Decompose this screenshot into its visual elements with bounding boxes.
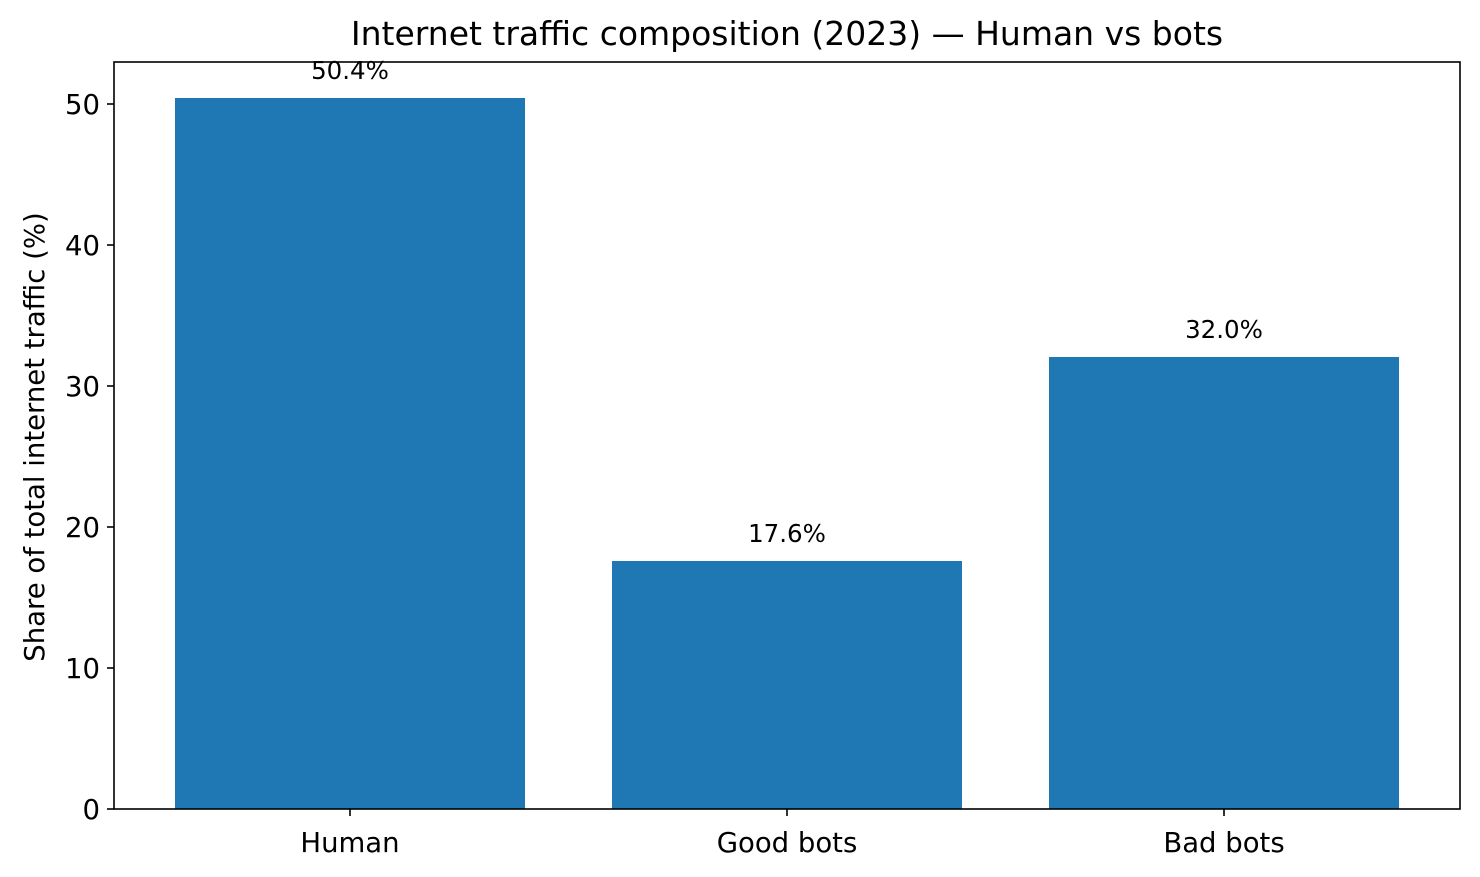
axes frame (114, 62, 1460, 809)
value labels (311, 56, 1263, 548)
y tick labels: 30 (65, 371, 100, 403)
x tick labels: Human (300, 827, 400, 859)
bar: Good bots (612, 561, 962, 809)
y tick labels: 20 (65, 512, 100, 544)
x tick labels (300, 827, 1285, 859)
value labels: 32.0% (1185, 315, 1263, 344)
y tick labels: 50 (65, 89, 100, 121)
bar: Human (175, 98, 525, 809)
title: Internet traffic composition (2023) — Human vs bots (351, 14, 1223, 53)
y tick labels (65, 89, 100, 826)
value labels: 17.6% (748, 519, 826, 548)
x tick labels: Bad bots (1163, 827, 1285, 859)
y axis ticks (107, 104, 1224, 816)
bar: Bad bots (1049, 357, 1399, 809)
y axis label: Share of total internet traffic (%) (19, 212, 51, 662)
value labels: 50.4% (311, 56, 389, 85)
x tick labels: Good bots (717, 827, 857, 859)
y tick labels: 0 (82, 794, 100, 826)
y tick labels: 40 (65, 230, 100, 262)
y tick labels: 10 (65, 653, 100, 685)
